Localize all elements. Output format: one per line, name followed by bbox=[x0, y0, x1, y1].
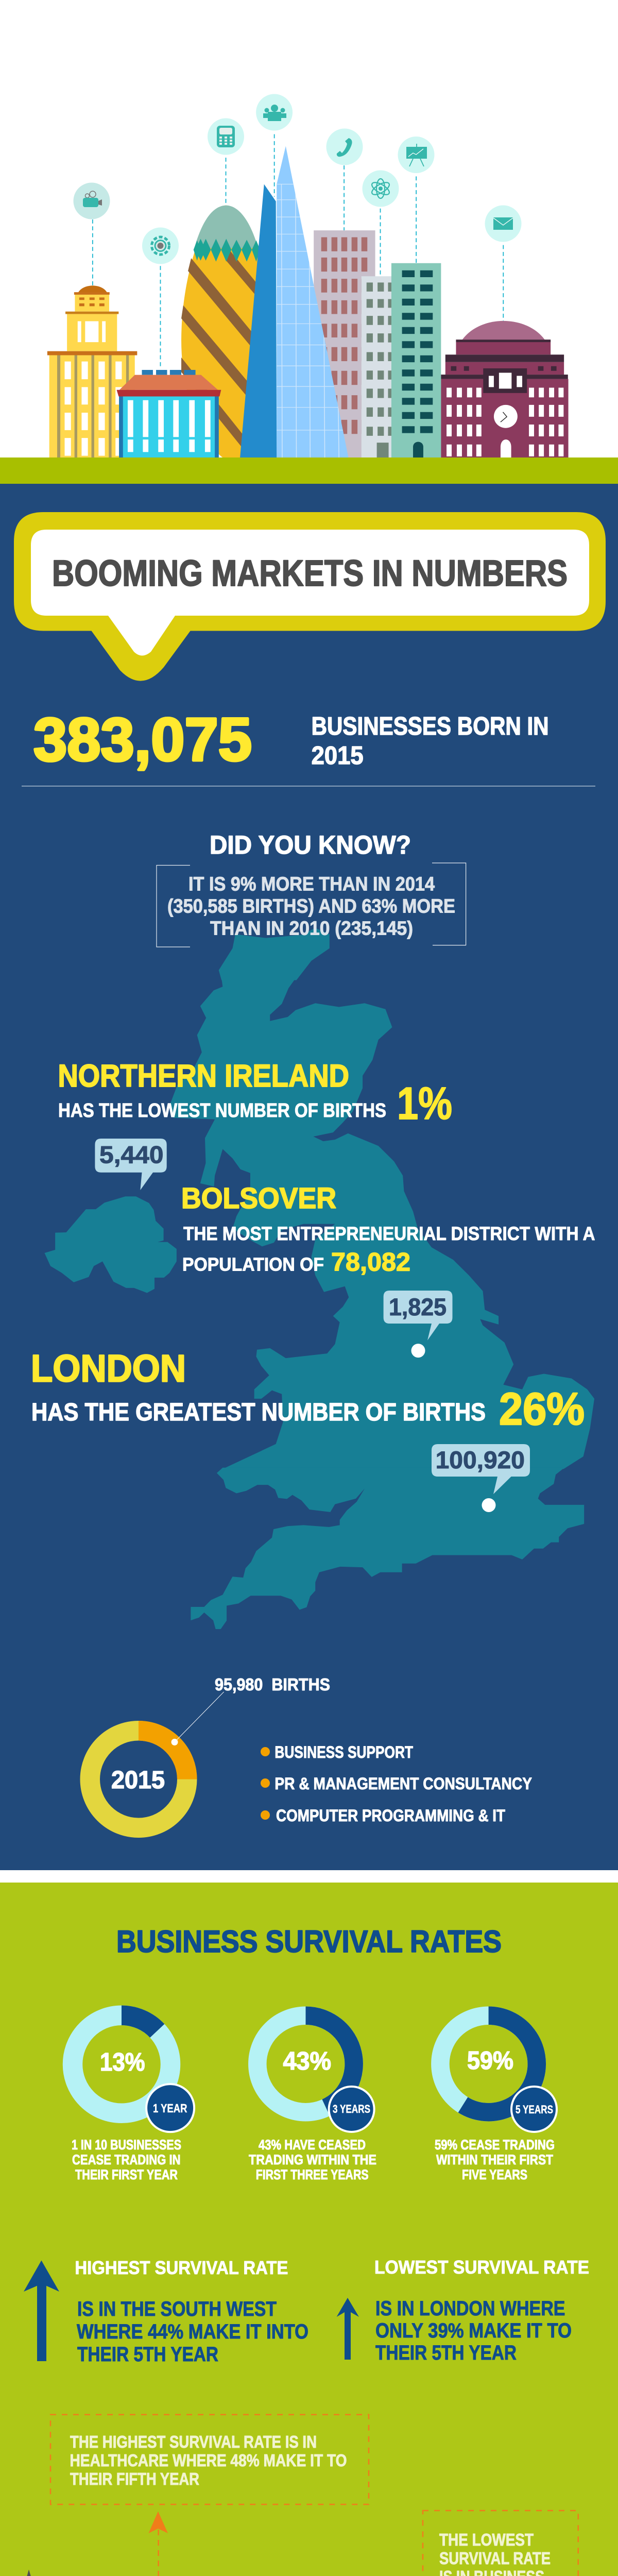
panel: survival rates bbox=[0, 1883, 618, 2576]
arrow: healthcare connector bbox=[148, 2511, 243, 2576]
text: london bbox=[31, 1347, 585, 1434]
text: northern ireland: NORTHERN IRELAND bbox=[58, 1058, 349, 1093]
donut: 1 year: 13% bbox=[100, 2048, 145, 2076]
building: maroon hall bbox=[441, 321, 569, 457]
callout: 5,440 bbox=[95, 1139, 167, 1190]
donut: 1 year: 1 IN 10 BUSINESSES bbox=[72, 2137, 181, 2153]
building: blue block bbox=[117, 370, 221, 457]
callout: healthcare: THE HIGHEST SURVIVAL RATE IS IN bbox=[70, 2432, 317, 2451]
donut: 3 years: 3 YEARS bbox=[333, 2103, 370, 2115]
title speech bubble bbox=[14, 512, 606, 681]
donut: 3 years: 43% HAVE CEASED bbox=[259, 2137, 366, 2153]
icon: presentation chart bbox=[398, 137, 435, 173]
donut: 3 years: 43% bbox=[283, 2047, 331, 2075]
donut chart: 2015 bbox=[90, 1675, 330, 1828]
chart axes bbox=[23, 2570, 404, 2576]
donut: 5 years bbox=[435, 2015, 557, 2182]
donut: 1 year: CEASE TRADING IN bbox=[72, 2152, 180, 2167]
text: bolsover: 78,082 bbox=[331, 1248, 410, 1277]
callout: 5,440: 5,440 bbox=[99, 1141, 164, 1168]
callout: comparison bbox=[157, 863, 466, 947]
callout: comparison: IT IS 9% MORE THAN IN 2014 bbox=[188, 874, 435, 895]
text: northern ireland bbox=[58, 1058, 452, 1129]
callout: 100,920: 100,920 bbox=[436, 1446, 525, 1473]
text: highest survival rate: HIGHEST SURVIVAL RATE bbox=[75, 2257, 288, 2278]
donut: 5 years: 5 YEARS bbox=[516, 2103, 553, 2116]
callout: healthcare: HEALTHCARE WHERE 48% MAKE IT TO bbox=[70, 2451, 347, 2470]
callout: business support bbox=[423, 2511, 578, 2576]
donut: 5 years: 59% bbox=[467, 2047, 513, 2075]
connector lines bbox=[93, 134, 503, 368]
donut: 5 years: FIVE YEARS bbox=[462, 2167, 527, 2182]
donut: 3 years: FIRST THREE YEARS bbox=[256, 2167, 369, 2182]
text: london: LONDON bbox=[31, 1347, 186, 1390]
callout: comparison: (350,585 BIRTHS) AND 63% MORE bbox=[167, 896, 455, 918]
donut: 5 years: WITHIN THEIR FIRST bbox=[436, 2152, 553, 2167]
donut: 1 year: 1 YEAR bbox=[153, 2102, 187, 2115]
stat: businesses born bbox=[33, 706, 549, 774]
callout: 100,920 bbox=[432, 1444, 530, 1512]
text: highest survival rate: THEIR 5TH YEAR bbox=[77, 2343, 218, 2366]
callout: business support: SURVIVAL RATE bbox=[439, 2549, 551, 2568]
arrow: highest bbox=[24, 2261, 59, 2361]
arrow: lowest bbox=[337, 2298, 359, 2360]
text: northern ireland: 1% bbox=[397, 1078, 452, 1129]
heading: did you know: DID YOU KNOW? bbox=[210, 831, 411, 859]
icon: video camera bbox=[73, 182, 110, 219]
building: grey block bbox=[362, 276, 400, 457]
donut: 5 years: 59% CEASE TRADING bbox=[435, 2137, 555, 2153]
building: gherkin bbox=[181, 206, 276, 457]
stat: businesses born: BUSINESSES BORN IN bbox=[312, 713, 549, 740]
text: lowest survival rate: IS IN LONDON WHERE bbox=[375, 2297, 565, 2320]
callout: comparison: THAN IN 2010 (235,145) bbox=[210, 918, 413, 940]
icon: gear bbox=[142, 228, 179, 264]
legend: sectors: COMPUTER PROGRAMMING & IT bbox=[276, 1806, 505, 1825]
text: northern ireland: HAS THE LOWEST NUMBER OF BIRTHS bbox=[58, 1100, 386, 1122]
legend: sectors: PR & MANAGEMENT CONSULTANCY bbox=[274, 1774, 532, 1793]
text: highest survival rate: IS IN THE SOUTH WEST bbox=[77, 2298, 277, 2320]
callout: healthcare: THEIR FIFTH YEAR bbox=[70, 2469, 199, 2488]
legend: sectors bbox=[261, 1743, 532, 1825]
text: lowest survival rate: ONLY 39% MAKE IT TO bbox=[375, 2319, 572, 2342]
heading: business survival rates: BUSINESS SURVIVAL RATES bbox=[116, 1924, 502, 1959]
donut: 1 year: THEIR FIRST YEAR bbox=[75, 2167, 178, 2182]
legend: sectors: BUSINESS SUPPORT bbox=[274, 1743, 413, 1761]
stat: businesses born: 383,075 bbox=[33, 706, 252, 774]
building: pink tower bbox=[314, 230, 375, 457]
text: lowest survival rate: THEIR 5TH YEAR bbox=[375, 2342, 517, 2364]
icon: atom bbox=[363, 170, 399, 207]
text: london: 26% bbox=[499, 1383, 585, 1434]
text: highest survival rate bbox=[75, 2257, 308, 2366]
panel: booming markets bbox=[0, 484, 618, 1870]
text: bolsover: POPULATION OF bbox=[182, 1254, 324, 1275]
callout: healthcare bbox=[50, 2415, 369, 2504]
donut: 3 years: TRADING WITHIN THE bbox=[249, 2152, 376, 2167]
stat: businesses born: 2015 bbox=[312, 742, 364, 770]
building: yellow tower bbox=[47, 285, 137, 457]
icon: people bbox=[256, 94, 293, 131]
icon: calculator bbox=[208, 118, 244, 155]
callout: 1,825: 1,825 bbox=[389, 1293, 447, 1320]
text: lowest survival rate bbox=[374, 2257, 589, 2364]
ground band bbox=[0, 457, 618, 484]
text: london: HAS THE GREATEST NUMBER OF BIRTHS bbox=[31, 1399, 486, 1426]
skyline illustration bbox=[0, 134, 618, 484]
donut chart: 2015: 95,980 BIRTHS bbox=[215, 1675, 330, 1694]
building: the shard bbox=[240, 146, 349, 457]
callout: business support: THE LOWEST bbox=[439, 2530, 534, 2549]
callout: 1,825 bbox=[384, 1291, 452, 1358]
line chart bbox=[23, 2570, 404, 2576]
building: teal block bbox=[391, 263, 441, 457]
text: bolsover bbox=[181, 1182, 595, 1277]
text: highest survival rate: WHERE 44% MAKE IT INTO bbox=[77, 2320, 308, 2343]
text: bolsover: BOLSOVER bbox=[181, 1182, 336, 1215]
donut: 1 year bbox=[72, 2015, 194, 2182]
icon: phone bbox=[327, 129, 363, 165]
icon: envelope bbox=[485, 205, 521, 242]
donut: 3 years bbox=[249, 2015, 376, 2182]
map of UK bbox=[44, 928, 594, 1629]
donut chart: 2015: 2015 bbox=[111, 1767, 165, 1794]
text: lowest survival rate: LOWEST SURVIVAL RATE bbox=[374, 2257, 589, 2278]
